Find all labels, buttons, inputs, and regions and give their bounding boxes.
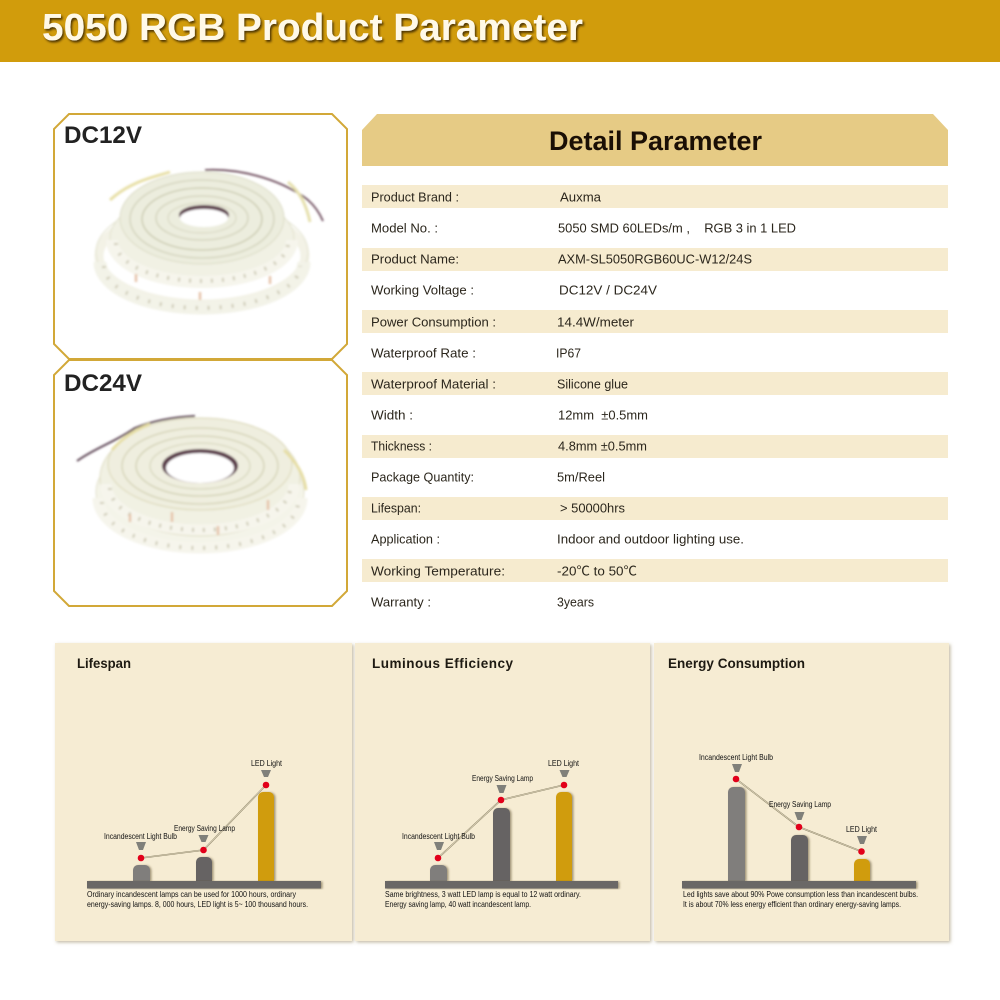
row: width <box>371 408 648 422</box>
row: application: Indoor and outdoor lighting use. <box>557 532 744 546</box>
luminous efficiency description: Same brightness, 3 watt LED lamp is equal to 12 watt ordinary. <box>385 890 581 899</box>
image: LED strip coil 12V <box>96 170 323 308</box>
row: waterproof material: Silicone glue <box>557 376 628 392</box>
energy consumption bar chart <box>682 753 916 888</box>
table: parameters <box>362 185 948 610</box>
lifespan bar chart: Incandescent Light Bulb <box>104 832 177 841</box>
energy consumption description: Led lights save about 90% Powe consumption less than incandescent bulbs. <box>683 890 918 899</box>
row: lifespan <box>371 500 625 516</box>
luminous efficiency bar chart: Incandescent Light Bulb <box>402 832 475 841</box>
label: DC24V: DC24V <box>64 370 142 397</box>
energy consumption bar chart: Energy Saving Lamp <box>769 800 831 809</box>
panel: DC24V product <box>54 360 347 606</box>
energy consumption description <box>683 890 918 909</box>
energy consumption description: It is about 70% less energy efficient than ordinary energy-saving lamps. <box>683 900 901 909</box>
row: warranty: Warranty : <box>371 594 431 610</box>
lifespan description: Ordinary incandescent lamps can be used for 1000 hours, ordinary <box>87 890 296 899</box>
row: application: Application : <box>371 532 440 546</box>
luminous efficiency bar chart: Energy Saving Lamp <box>472 774 533 783</box>
row: power consumption: Power Consumption : <box>371 314 496 330</box>
panel: luminous efficiency <box>355 643 650 941</box>
lifespan bar chart: Energy Saving Lamp <box>174 824 235 833</box>
row: power consumption: 14.4W/meter <box>557 314 635 330</box>
row: package quantity: 5m/Reel <box>557 470 605 484</box>
row: application <box>371 532 744 546</box>
energy consumption bar chart: Incandescent Light Bulb <box>699 753 773 762</box>
luminous efficiency bar chart: LED Light <box>548 759 580 768</box>
label: DC12V: DC12V <box>64 122 142 149</box>
row: package quantity <box>371 470 605 484</box>
header banner <box>0 0 1000 62</box>
lifespan bar chart <box>87 759 321 888</box>
row: lifespan: > 50000hrs <box>560 500 625 516</box>
row: model no <box>371 220 796 236</box>
row: warranty <box>371 594 594 610</box>
row: working temperature: -20℃ to 50℃ <box>557 564 637 578</box>
row: warranty: 3years <box>557 594 594 610</box>
row: product name: AXM-SL5050RGB60UC-W12/24S <box>558 252 752 266</box>
lifespan bar chart: LED Light <box>251 759 283 768</box>
panel: detail parameter heading <box>362 114 948 166</box>
row: working voltage: DC12V / DC24V <box>559 282 657 298</box>
row: product name: Product Name: <box>371 252 459 266</box>
row: waterproof rate: Waterproof Rate : <box>371 346 476 360</box>
lifespan description: energy-saving lamps. 8, 000 hours, LED light is 5~ 100 thousand hours. <box>87 900 308 909</box>
row: waterproof rate: IP67 <box>556 346 581 360</box>
luminous efficiency description: Energy saving lamp, 40 watt incandescent lamp. <box>385 900 531 909</box>
row: model no: 5050 SMD 60LEDs/m , RGB 3 in 1 LED <box>558 220 796 236</box>
lifespan description <box>87 890 308 909</box>
row: thickness: Thickness : <box>371 438 432 454</box>
row: waterproof material: Waterproof Material : <box>371 376 496 392</box>
row: width: Width : <box>371 408 413 422</box>
row: waterproof rate <box>371 346 581 360</box>
luminous efficiency heading: Luminous Efficiency <box>372 656 513 671</box>
energy consumption heading: Energy Consumption <box>668 656 805 671</box>
panel: DC12V product <box>54 114 347 359</box>
row: product name <box>371 252 752 266</box>
row: working voltage: Working Voltage : <box>371 282 474 298</box>
heading text: Detail Parameter <box>549 126 762 156</box>
row: power consumption <box>371 314 635 330</box>
panel: lifespan <box>55 643 352 941</box>
page title: 5050 RGB Product Parameter <box>42 7 583 49</box>
row: working voltage <box>371 282 657 298</box>
luminous efficiency bar chart <box>385 759 618 888</box>
lifespan heading: Lifespan <box>77 656 131 671</box>
luminous efficiency description <box>385 890 581 909</box>
row: thickness <box>371 438 647 454</box>
row: working temperature <box>371 564 637 578</box>
image: LED strip coil 24V <box>77 416 306 548</box>
row: model no: Model No. : <box>371 220 438 236</box>
panel: energy consumption <box>654 643 949 941</box>
energy consumption bar chart: LED Light <box>846 825 878 834</box>
row: working temperature: Working Temperature: <box>371 564 505 578</box>
row: product brand: Product Brand : <box>371 190 459 204</box>
row: thickness: 4.8mm ±0.5mm <box>558 438 647 454</box>
row: lifespan: Lifespan: <box>371 500 421 516</box>
row: width: 12mm ±0.5mm <box>558 408 648 422</box>
row: waterproof material <box>371 376 628 392</box>
row: package quantity: Package Quantity: <box>371 470 474 484</box>
row: product brand: Auxma <box>560 190 602 204</box>
row: product brand <box>371 190 602 204</box>
